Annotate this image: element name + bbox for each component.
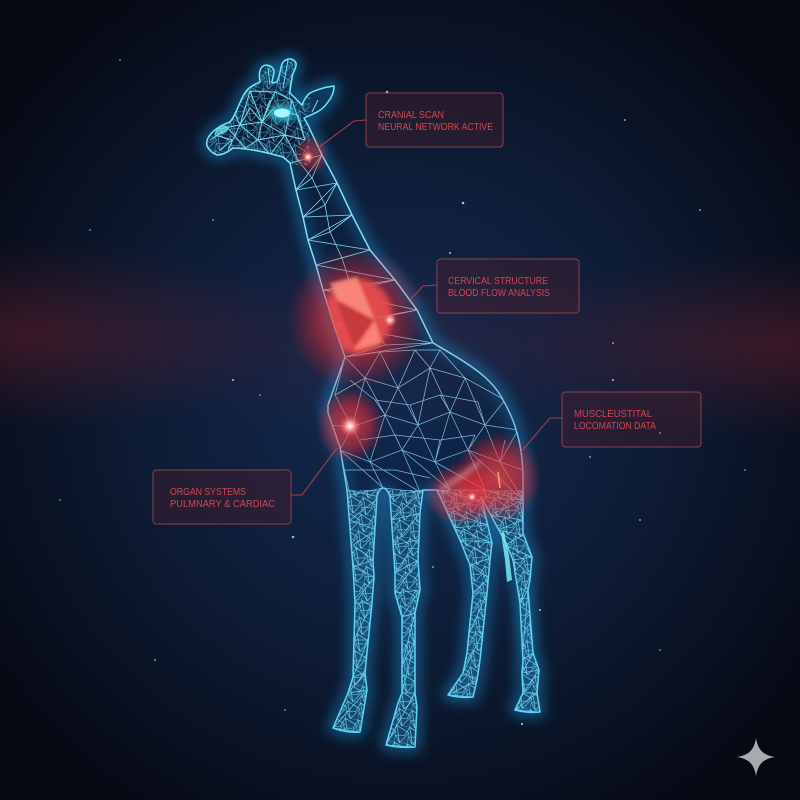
- icon: nostril glow: [214, 123, 230, 137]
- rear near leg mesh: [437, 490, 492, 697]
- callout: cervical structure: BLOOD FLOW ANALYSIS: [448, 288, 550, 299]
- front right leg mesh: [386, 490, 423, 747]
- tail: [501, 531, 512, 582]
- giraffe glow: [207, 59, 540, 747]
- silhouette outline: [207, 59, 540, 747]
- rear far leg mesh: [481, 497, 540, 712]
- callout: organ systems: ORGAN SYSTEMS: [170, 487, 246, 498]
- callout: cranial scan: CRANIAL SCAN: [378, 110, 444, 121]
- callout: musculoskeletal: [520, 392, 701, 453]
- icon: sparkle watermark: [737, 738, 775, 776]
- callout: cranial scan: [318, 93, 503, 148]
- callout: musculoskeletal: LOCOMATION DATA: [574, 421, 656, 432]
- red hotspot: musculoskeletal: [425, 432, 542, 526]
- icon: eye glow: [268, 104, 296, 122]
- front left leg mesh: [333, 490, 380, 732]
- giraffe wireframe: [205, 59, 540, 755]
- callout: organ systems: PULMNARY & CARDIAC: [170, 499, 275, 510]
- callout: musculoskeletal: MUSCLEUSTITAL: [574, 409, 652, 420]
- stars: [59, 59, 746, 725]
- callout: cervical structure: [410, 259, 579, 313]
- red hotspot: cranial: [293, 135, 329, 175]
- body mesh: [328, 350, 523, 500]
- head mesh: [210, 60, 318, 160]
- mesh: [210, 60, 540, 747]
- callout: cervical structure: CERVICAL STRUCTURE: [448, 276, 548, 287]
- leg fill: [205, 60, 540, 755]
- red hotspot: cervical: [288, 246, 424, 390]
- red hotspot: organ systems: [316, 387, 384, 463]
- callout: cranial scan: NEURAL NETWORK ACTIVE: [378, 122, 493, 133]
- callout: organ systems: [153, 448, 337, 524]
- neck mesh: [290, 155, 433, 357]
- giraffe body fill: [207, 59, 540, 747]
